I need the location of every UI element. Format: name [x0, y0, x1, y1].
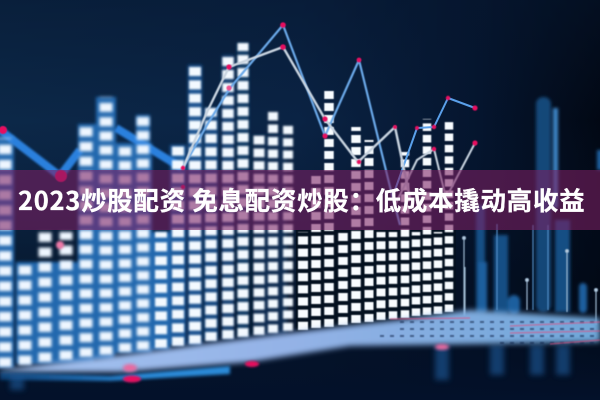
floor	[0, 310, 600, 381]
floor texture	[380, 322, 600, 343]
title: 2023炒股配资 免息配资炒股：低成本撬动高收益	[18, 181, 585, 218]
white thin stems	[463, 224, 597, 325]
title band	[0, 170, 600, 230]
floor reflections	[10, 345, 570, 390]
chart: bar columns (sharp right)	[303, 89, 449, 330]
background blue bars on the right	[476, 97, 600, 315]
blue glow behind bar columns	[0, 43, 287, 368]
thick blue trend line	[0, 128, 182, 176]
chart: bar columns (middle)	[161, 43, 288, 348]
chart: bar columns (blurred left)	[5, 97, 143, 367]
blue and white trend lines	[183, 25, 475, 225]
dark backing behind sharp columns	[296, 230, 456, 332]
pink data points	[0, 22, 478, 382]
